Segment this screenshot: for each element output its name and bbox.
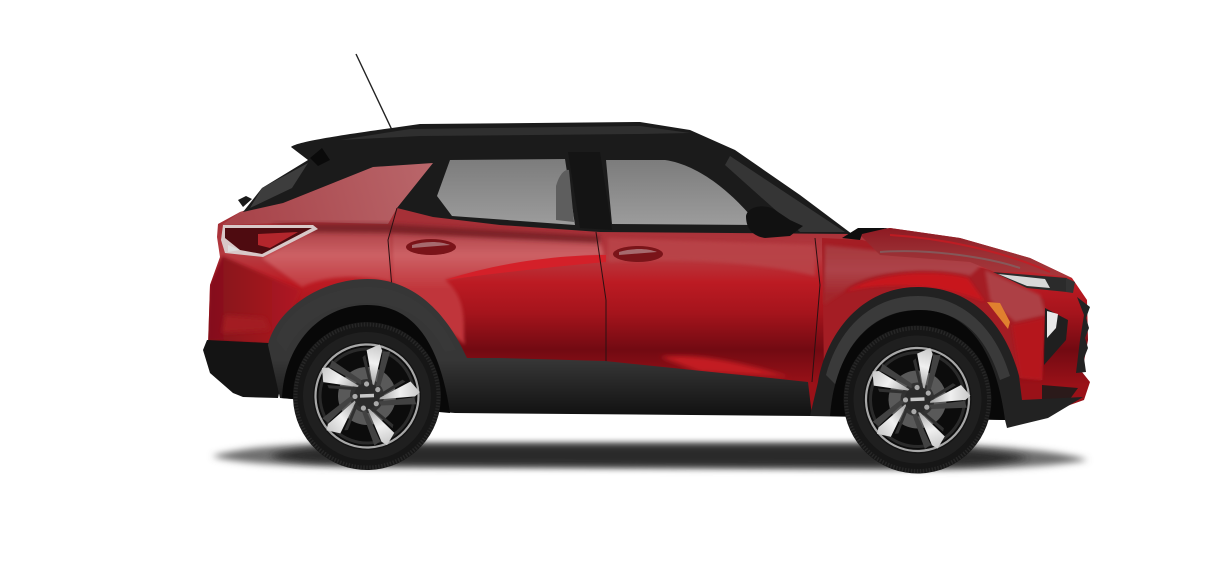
painted panels: [208, 160, 1046, 380]
front fog lamp housing: [1044, 308, 1068, 365]
front wheel arch cladding: [810, 287, 1083, 428]
tail light: [221, 225, 318, 257]
amber side marker: [987, 302, 1010, 329]
rear lower panel: [208, 256, 300, 345]
rear door seam: [388, 208, 397, 300]
rear glass: [250, 163, 308, 208]
black roof and pillars: [243, 122, 852, 234]
red body shell: [208, 158, 1090, 412]
rear quarter light panel: [262, 228, 392, 287]
antenna: [356, 54, 392, 130]
front fender panel: [822, 238, 1045, 380]
front wheel well: [830, 310, 1005, 420]
rear bumper: [203, 340, 290, 398]
side mirror: [746, 206, 803, 238]
shoulder crease shadow: [270, 224, 600, 243]
lower grille: [1042, 385, 1078, 399]
door seam: [596, 232, 606, 362]
upper rear pillar panel: [222, 160, 436, 225]
B pillar: [568, 152, 612, 230]
rear door handle: [406, 239, 456, 255]
front wheel: [841, 323, 994, 476]
front door seam: [812, 238, 820, 382]
rear seat silhouette: [556, 170, 574, 222]
rear camera bump: [310, 148, 330, 166]
wiper: [842, 228, 888, 240]
hood: [858, 228, 1072, 278]
illustration: red SUV side view: [203, 54, 1090, 474]
rear door window: [437, 159, 575, 225]
grille: [1076, 297, 1090, 373]
rear wiper arm: [238, 196, 252, 207]
rear wheel well: [282, 305, 450, 413]
windshield: [725, 156, 845, 232]
front door handle: [613, 246, 663, 262]
headlight: [993, 272, 1067, 292]
rear wheel: [290, 319, 444, 473]
car body: [203, 122, 1090, 428]
door highlight panel: [392, 232, 604, 345]
rear wheel arch cladding: [268, 279, 812, 416]
front door window: [606, 160, 758, 225]
ground shadow: [212, 443, 1088, 469]
